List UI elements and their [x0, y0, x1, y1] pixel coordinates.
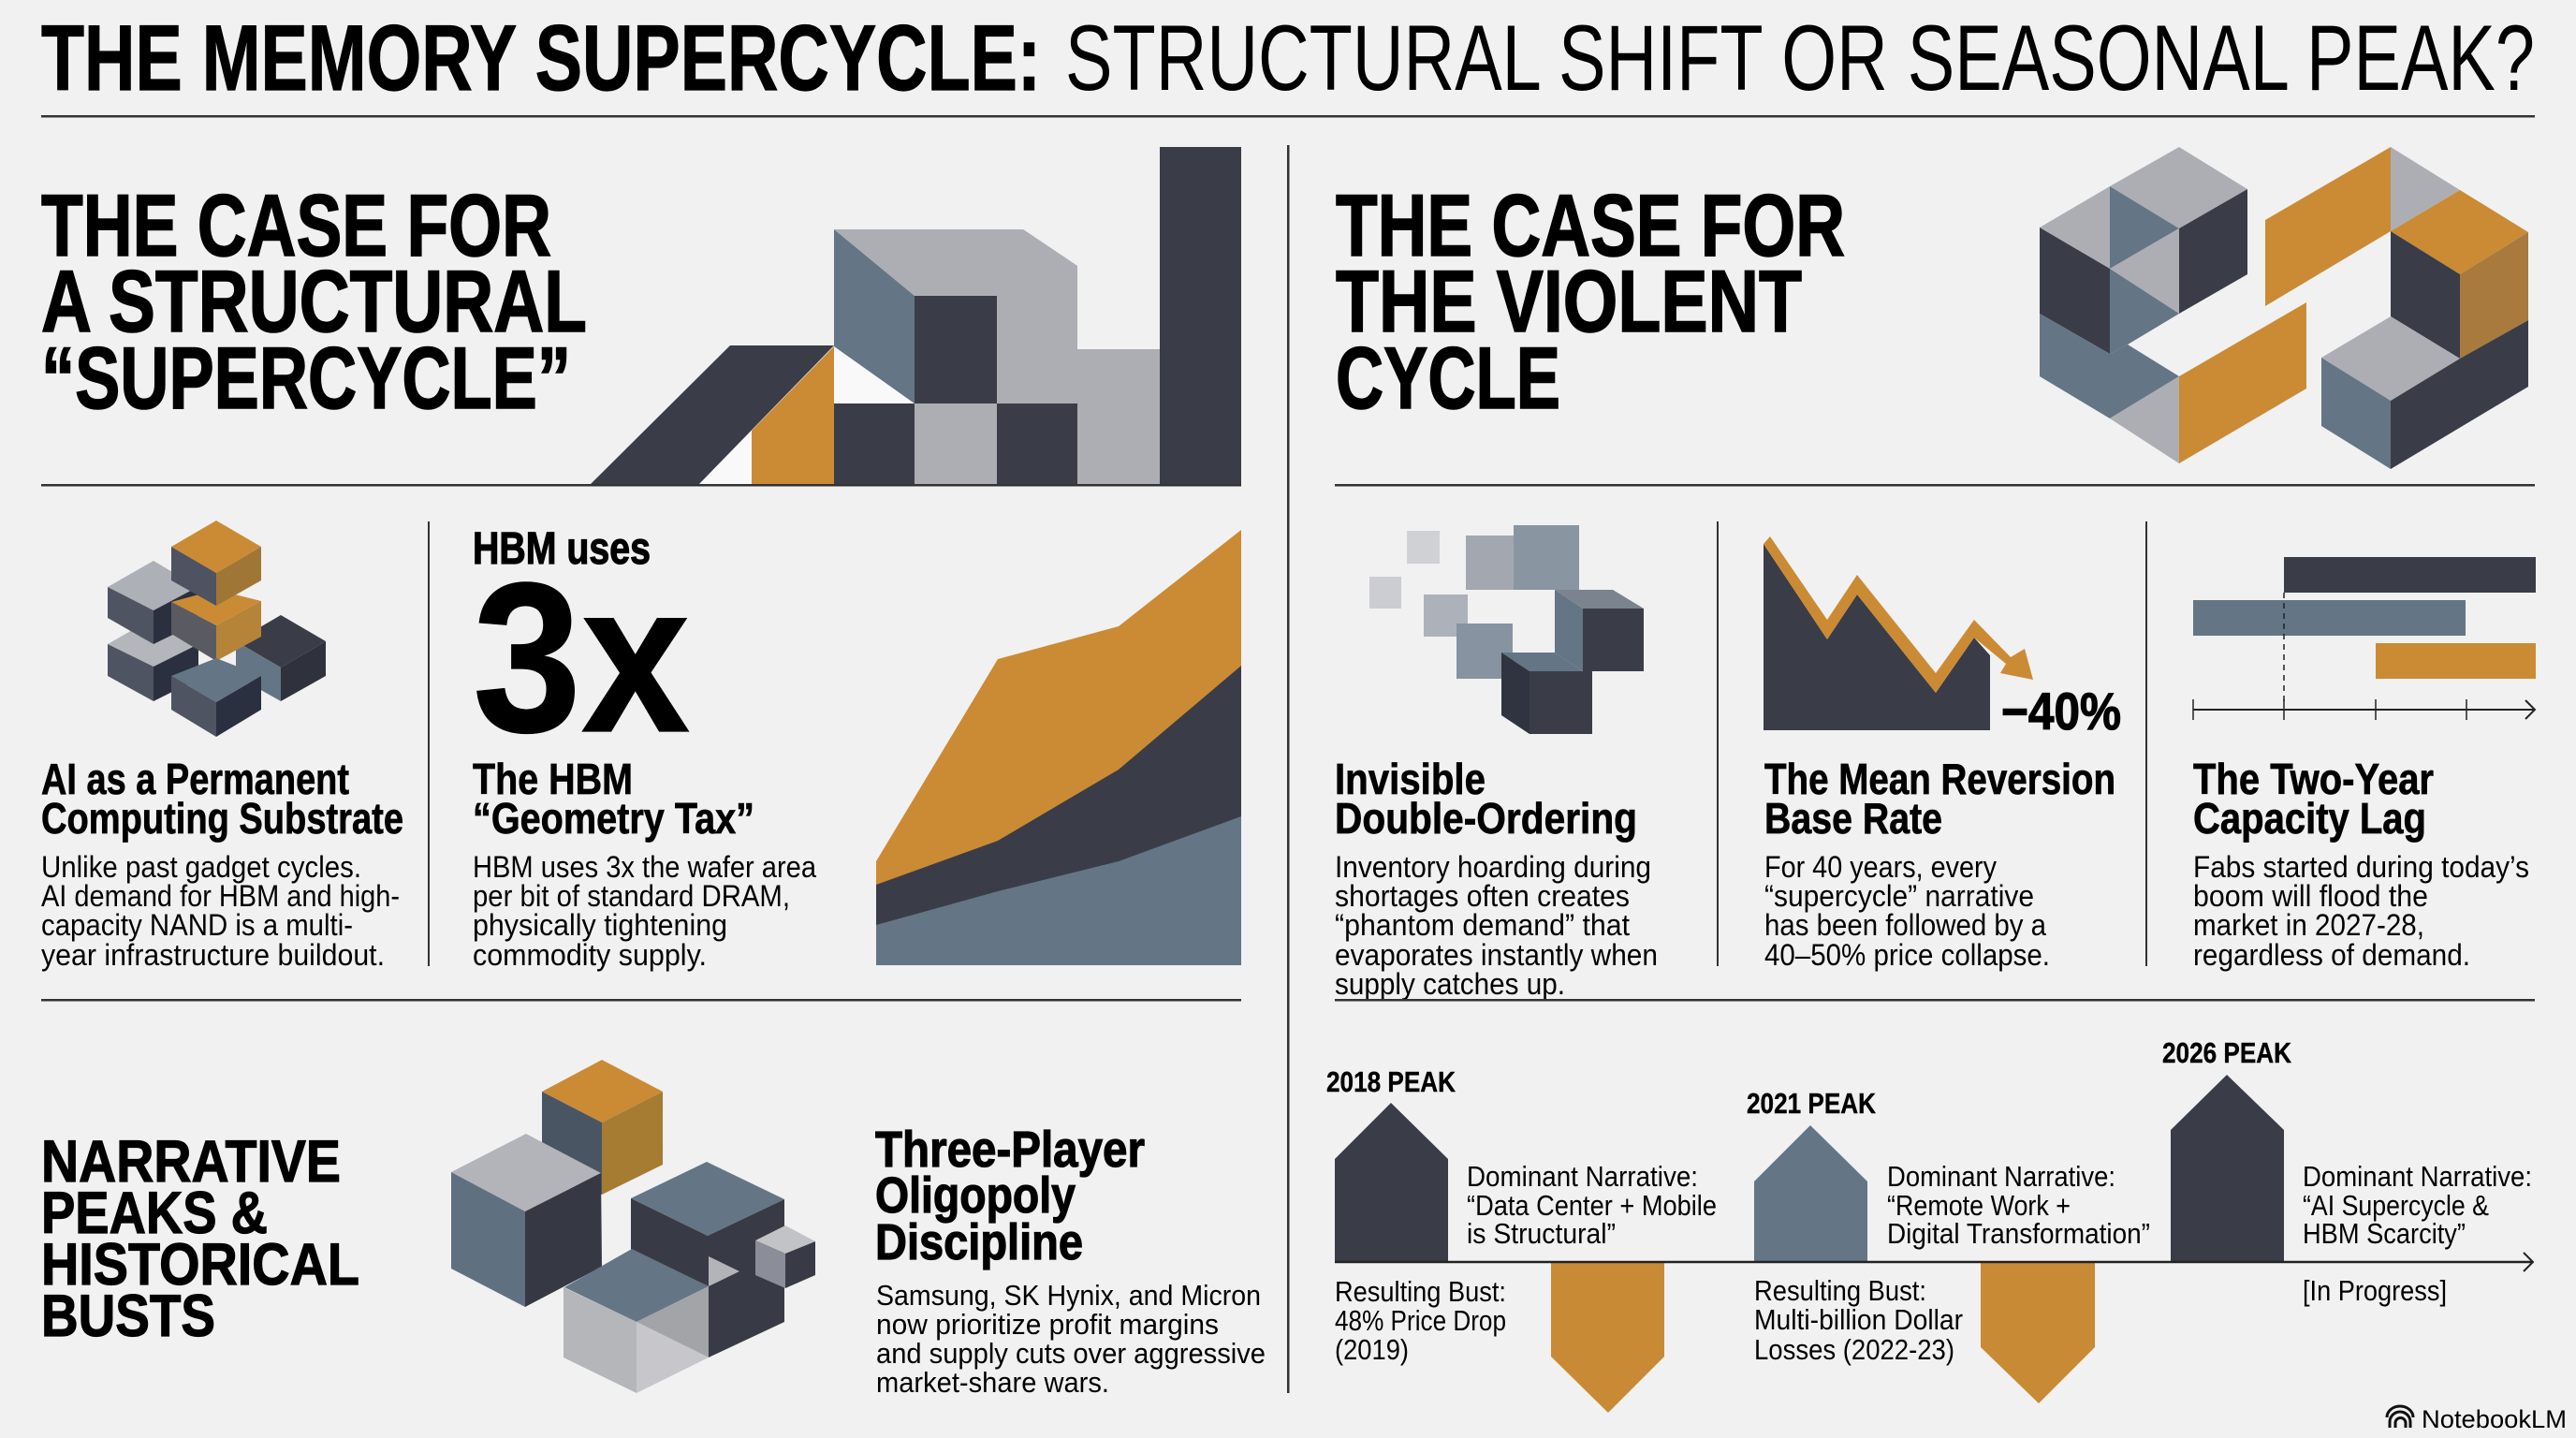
narrative 2021	[1887, 1160, 2150, 1250]
text: three-player oligopoly discipline: now prioritize profit margins	[876, 1308, 1219, 1341]
chart: falling price area with arrow: −40%	[2001, 682, 2121, 741]
text: mean reversion: has been followed by a	[1764, 908, 2046, 942]
heading: structural supercycle: “SUPERCYCLE”	[41, 329, 571, 427]
icon: impossible isometric loop	[2040, 147, 2528, 469]
narrative 2018	[1467, 1160, 1717, 1250]
heading: narrative peaks and historical busts: PEAKS &	[41, 1181, 268, 1246]
text: three-player oligopoly discipline: Oligopoly	[875, 1167, 1076, 1224]
text: double-ordering: evaporates instantly when	[1335, 938, 1658, 972]
peak 2021: 2021 PEAK	[1747, 1087, 1877, 1120]
text: capacity lag: regardless of demand.	[2193, 938, 2470, 972]
peak 2018: 2018 PEAK	[1326, 1065, 1456, 1098]
narrative 2021: Dominant Narrative:	[1887, 1160, 2115, 1193]
panel: HBM geometry tax	[473, 524, 1241, 972]
text: capacity lag: market in 2027-28,	[2193, 908, 2424, 942]
bust text 2022-23: Losses (2022-23)	[1754, 1333, 1954, 1366]
text: capacity lag: Fabs started during today’s	[2193, 850, 2529, 884]
big stat: 3x: 3x	[473, 539, 690, 777]
panel: case for violent cycle	[1336, 147, 2528, 469]
text: three-player oligopoly discipline: market-share wars.	[876, 1366, 1109, 1399]
bust text 2019: 48% Price Drop	[1335, 1304, 1506, 1337]
narrative 2021: Digital Transformation”	[1887, 1217, 2150, 1250]
peak 2026	[2162, 1036, 2292, 1262]
text: capacity lag: boom will flood the	[2193, 879, 2428, 913]
text: AI substrate: capacity NAND is a multi-	[41, 908, 353, 942]
logo: NotebookLM: NotebookLM	[2422, 1405, 2567, 1433]
bust arrow 2022-23	[1981, 1262, 2095, 1403]
bust text 2022-23: Multi-billion Dollar	[1754, 1303, 1963, 1336]
heading: structural supercycle: THE CASE FOR	[41, 176, 551, 274]
icon: fading blocks	[1369, 525, 1644, 734]
heading: narrative peaks and historical busts	[41, 1129, 359, 1349]
bust arrow 2019	[1551, 1262, 1664, 1413]
peak 2018	[1326, 1065, 1456, 1262]
title: THE MEMORY SUPERCYCLE:	[41, 6, 1041, 110]
narrative 2026: “AI Supercycle &	[2303, 1189, 2489, 1222]
text: mean reversion: “supercycle” narrative	[1764, 879, 2034, 913]
bust text 2022-23	[1754, 1274, 1963, 1366]
text: double-ordering: Double-Ordering	[1335, 794, 1637, 843]
text: double-ordering	[1335, 755, 1658, 1001]
big stat: 3x: HBM uses	[473, 524, 651, 574]
text: mean reversion: For 40 years, every	[1764, 850, 1997, 884]
text: AI substrate: AI as a Permanent	[41, 755, 349, 803]
text: geometry tax: commodity supply.	[473, 938, 707, 972]
narrative 2021: “Remote Work +	[1887, 1189, 2071, 1222]
heading: violent cycle	[1336, 176, 1845, 427]
text: double-ordering: Invisible	[1335, 755, 1486, 803]
text: geometry tax: physically tightening	[473, 908, 727, 942]
text: double-ordering: Inventory hoarding during	[1335, 850, 1651, 884]
heading: structural supercycle: A STRUCTURAL	[41, 252, 587, 350]
heading: narrative peaks and historical busts: BUSTS	[41, 1284, 215, 1349]
bust text 2022-23: Resulting Bust:	[1754, 1274, 1926, 1307]
heading: narrative peaks and historical busts: HISTORICAL	[41, 1232, 359, 1298]
narrative 2018: Dominant Narrative:	[1467, 1160, 1698, 1193]
text: AI substrate: Unlike past gadget cycles.	[41, 850, 361, 884]
text: double-ordering: supply catches up.	[1335, 967, 1565, 1001]
panel: two-year capacity lag	[2193, 557, 2536, 972]
panel: mean reversion base rate	[1764, 536, 2121, 972]
text: AI substrate: year infrastructure buildout.	[41, 938, 385, 972]
narrative 2018: is Structural”	[1467, 1217, 1616, 1250]
bust text 2019	[1335, 1275, 1506, 1366]
text: three-player oligopoly discipline: Discipline	[875, 1214, 1083, 1270]
panel: invisible double-ordering	[1335, 525, 1658, 1001]
text: capacity lag: The Two-Year	[2193, 755, 2434, 803]
peak 2026: 2026 PEAK	[2162, 1036, 2292, 1069]
icon: rising isometric bars	[590, 147, 1241, 485]
heading: narrative peaks and historical busts: NARRATIVE	[41, 1129, 341, 1195]
text: capacity lag	[2193, 755, 2529, 972]
text: mean reversion: Base Rate	[1764, 794, 1942, 843]
chart: stacked area	[876, 530, 1241, 965]
text: AI substrate: AI demand for HBM and high-	[41, 879, 400, 913]
narrative 2026	[2303, 1160, 2532, 1250]
text: mean reversion	[1764, 755, 2115, 972]
text: geometry tax	[473, 755, 816, 972]
peak 2021	[1747, 1087, 1877, 1262]
chart: falling price area with arrow	[1764, 536, 2121, 741]
heading: structural supercycle	[41, 176, 587, 427]
chart: gantt bars	[2193, 557, 2536, 720]
chart: peak and bust timeline	[1326, 1036, 2533, 1413]
text: capacity lag: Capacity Lag	[2193, 794, 2426, 843]
text: double-ordering: “phantom demand” that	[1335, 908, 1630, 942]
text: geometry tax: The HBM	[473, 755, 633, 803]
heading: violent cycle: CYCLE	[1336, 329, 1560, 427]
text: mean reversion: The Mean Reversion	[1764, 755, 2115, 803]
panel: case for structural supercycle	[41, 147, 1241, 485]
status: in progress: [In Progress]	[2303, 1274, 2447, 1307]
text: geometry tax: per bit of standard DRAM,	[473, 879, 790, 913]
text: three-player oligopoly discipline: Samsung, SK Hynix, and Micron	[876, 1279, 1261, 1312]
text: double-ordering: shortages often creates	[1335, 879, 1630, 913]
narrative 2018: “Data Center + Mobile	[1467, 1189, 1717, 1222]
timeline axis	[1335, 1253, 2533, 1271]
bust text 2019: (2019)	[1335, 1333, 1409, 1366]
narrative 2026: HBM Scarcity”	[2303, 1217, 2466, 1250]
text: geometry tax: HBM uses 3x the wafer area	[473, 850, 816, 884]
text: mean reversion: 40–50% price collapse.	[1764, 938, 2050, 972]
icon: stacked cubes	[108, 521, 326, 737]
bust text 2019: Resulting Bust:	[1335, 1275, 1506, 1308]
text: three-player oligopoly discipline	[875, 1122, 1266, 1399]
text: three-player oligopoly discipline: and supply cuts over aggressive	[876, 1337, 1266, 1370]
panel: AI as a permanent computing substrate	[41, 521, 403, 972]
text: AI substrate: Computing Substrate	[41, 794, 403, 843]
heading: violent cycle: THE CASE FOR	[1336, 176, 1845, 274]
text: AI substrate	[41, 755, 403, 972]
text: three-player oligopoly discipline: Three-Player	[875, 1122, 1145, 1178]
narrative 2026: Dominant Narrative:	[2303, 1160, 2532, 1193]
icon: isometric cube cluster	[451, 1060, 815, 1393]
text: geometry tax: “Geometry Tax”	[473, 794, 754, 843]
heading: violent cycle: THE VIOLENT	[1336, 252, 1802, 350]
title	[41, 6, 2535, 110]
